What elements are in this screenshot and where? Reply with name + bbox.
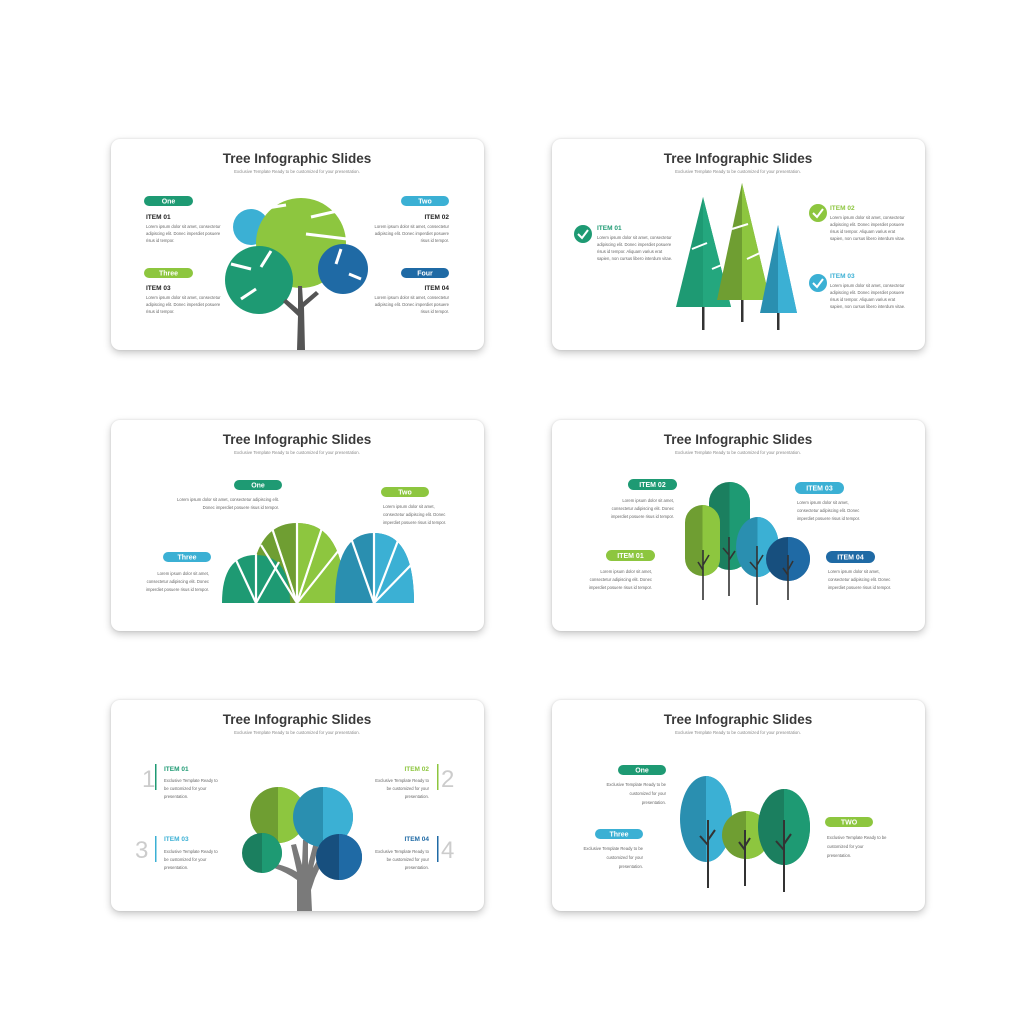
item two: consectetur adipiscing elit. Donec xyxy=(383,512,445,517)
item three: customized for your xyxy=(606,855,644,860)
heading xyxy=(664,712,812,735)
item two xyxy=(825,817,887,858)
item 03: consectetur adipiscing elit. Donec xyxy=(797,508,859,513)
item three: Exclusive Template Ready to be xyxy=(583,846,644,851)
item one: Lorem ipsum dolor sit amet, consectetur adipiscing elit. xyxy=(177,497,279,502)
item 01: Exclusive Template Ready to xyxy=(164,778,218,783)
heading: Exclusive Template Ready to be customized for your presentation. xyxy=(675,169,801,174)
item 03 xyxy=(795,482,860,521)
item 01: ITEM 01 xyxy=(617,553,644,560)
item 02: consectetur adipiscing elit. Donec xyxy=(612,506,674,511)
item 03: be customized for your xyxy=(164,857,207,862)
item 03: Exclusive Template Ready to xyxy=(164,849,218,854)
item 02 with check: ITEM 02 xyxy=(830,205,855,212)
item one: customized for your xyxy=(629,791,667,796)
item three: Three xyxy=(177,554,197,562)
item 01 with check: sapien, non cursus libero interdum vitae. xyxy=(597,256,672,261)
item 03 xyxy=(135,836,218,870)
item 02 xyxy=(375,764,454,799)
item 04: imperdiet posuere risus id tempor. xyxy=(828,585,891,590)
item four: Lorem ipsum dolor sit amet, consectetur xyxy=(375,295,450,300)
item three: adipiscing elit. Donec imperdiet posuere xyxy=(146,302,221,307)
heading xyxy=(664,151,812,174)
four round trees xyxy=(685,482,810,605)
heading: Tree Infographic Slides xyxy=(223,432,371,447)
heading: Exclusive Template Ready to be customized for your presentation. xyxy=(675,730,801,735)
heading xyxy=(223,151,371,174)
item two: imperdiet posuere risus id tempor. xyxy=(383,520,446,525)
item three xyxy=(583,829,644,869)
item two: adipiscing elit. Donec imperdiet posuere xyxy=(375,231,450,236)
heading: Tree Infographic Slides xyxy=(223,712,371,727)
item three: risus id tempor. xyxy=(146,309,174,314)
item 04 xyxy=(375,836,454,870)
item four xyxy=(375,268,450,314)
item one xyxy=(177,480,282,510)
heading: Exclusive Template Ready to be customized for your presentation. xyxy=(234,450,360,455)
item two xyxy=(381,487,446,525)
heading: Exclusive Template Ready to be customized for your presentation. xyxy=(675,450,801,455)
item 01 xyxy=(589,550,655,590)
item 01 with check: Lorem ipsum dolor sit amet, consectetur xyxy=(597,235,672,240)
item 02 with check: risus id tempor. Aliquam varius erat xyxy=(830,229,896,234)
item 02 with check: sapien, non cursus libero interdum vitae. xyxy=(830,236,905,241)
panel: slide 2 pine trees xyxy=(552,139,925,350)
item 02 with check: Lorem ipsum dolor sit amet, consectetur xyxy=(830,215,905,220)
tree illustration xyxy=(225,198,368,350)
heading: Tree Infographic Slides xyxy=(664,432,812,447)
item 02 with check xyxy=(809,204,905,241)
item 02: presentation. xyxy=(405,794,429,799)
item 01 with check: risus id tempor. Aliquam varius erat xyxy=(597,249,663,254)
item 03 with check: ITEM 03 xyxy=(830,273,855,280)
item 02: imperdiet posuere risus id tempor. xyxy=(611,514,674,519)
item two: ITEM 02 xyxy=(424,214,449,221)
item 04: ITEM 04 xyxy=(404,836,429,843)
item one xyxy=(606,765,667,805)
item 02: Lorem ipsum dolor sit amet, xyxy=(622,498,674,503)
item one: Exclusive Template Ready to be xyxy=(606,782,667,787)
item 02 xyxy=(611,479,677,519)
item three xyxy=(146,552,211,592)
item 01: imperdiet posuere risus id tempor. xyxy=(589,585,652,590)
heading xyxy=(223,712,371,735)
item 02: 2 xyxy=(441,766,454,793)
item two: Lorem ipsum dolor sit amet, consectetur xyxy=(375,224,450,229)
pine trees xyxy=(676,183,797,330)
item two: customized for your xyxy=(827,844,864,849)
item four: Four xyxy=(417,270,433,278)
bushes xyxy=(222,522,414,603)
item 03 with check: adipiscing elit. Donec imperdiet posuere xyxy=(830,290,905,295)
item one xyxy=(144,196,221,243)
item 01: ITEM 01 xyxy=(164,766,189,773)
panel: slide 1 big leaf tree xyxy=(111,139,484,350)
item 02: ITEM 02 xyxy=(639,482,666,489)
item 03: Lorem ipsum dolor sit amet, xyxy=(797,500,849,505)
item 01: presentation. xyxy=(164,794,188,799)
item 03 with check: Lorem ipsum dolor sit amet, consectetur xyxy=(830,283,905,288)
item 01 with check xyxy=(574,225,672,261)
heading: Tree Infographic Slides xyxy=(223,151,371,166)
item 03 with check: sapien, non cursus libero interdum vitae. xyxy=(830,304,905,309)
item one: One xyxy=(635,768,649,774)
panel: slide 5 numbered hand tree xyxy=(111,700,484,911)
heading: Tree Infographic Slides xyxy=(664,151,812,166)
item 03 with check: risus id tempor. Aliquam varius erat xyxy=(830,297,896,302)
heading xyxy=(223,432,371,455)
item three: Lorem ipsum dolor sit amet, consectetur xyxy=(146,295,221,300)
item 04: 4 xyxy=(441,837,454,864)
heading: Exclusive Template Ready to be customized for your presentation. xyxy=(234,730,360,735)
item one: One xyxy=(251,482,265,490)
item 01: Lorem ipsum dolor sit amet, xyxy=(600,569,652,574)
item 02: Exclusive Template Ready to xyxy=(375,778,430,783)
item one: One xyxy=(162,198,175,206)
item four: risus id tempor. xyxy=(421,309,449,314)
item three xyxy=(144,268,221,314)
item 03: presentation. xyxy=(164,865,188,870)
item one: ITEM 01 xyxy=(146,214,171,221)
item two: risus id tempor. xyxy=(421,238,449,243)
item three: Lorem ipsum dolor sit amet, xyxy=(157,571,209,576)
item 01: be customized for your xyxy=(164,786,207,791)
item 04: Lorem ipsum dolor sit amet, xyxy=(828,569,880,574)
item three: Three xyxy=(609,832,629,838)
hand tree xyxy=(242,787,362,911)
item one: risus id tempor. xyxy=(146,238,174,243)
item 02: be customized for your xyxy=(387,786,430,791)
item 01: 1 xyxy=(142,766,155,793)
item one: adipiscing elit. Donec imperdiet posuere xyxy=(146,231,221,236)
panel: slide 4 capsule trees xyxy=(552,420,925,631)
heading xyxy=(664,432,812,455)
item three: presentation. xyxy=(619,864,643,869)
item two: presentation. xyxy=(827,853,851,858)
item one: Lorem ipsum dolor sit amet, consectetur xyxy=(146,224,221,229)
item 04: be customized for your xyxy=(387,857,430,862)
item 04 xyxy=(826,551,891,590)
item 04: ITEM 04 xyxy=(837,554,864,562)
item 03: ITEM 03 xyxy=(806,486,833,492)
item one: presentation. xyxy=(642,800,666,805)
item four: ITEM 04 xyxy=(424,285,449,292)
oval trees xyxy=(680,776,810,892)
item two xyxy=(375,196,450,243)
heading: Tree Infographic Slides xyxy=(664,712,812,727)
item 03 with check xyxy=(809,273,905,309)
item 01: consectetur adipiscing elit. Donec xyxy=(590,577,652,582)
item 03: imperdiet posuere risus id tempor. xyxy=(797,516,860,521)
item 03: 3 xyxy=(135,837,148,864)
item one: Donec imperdiet posuere risus id tempor. xyxy=(203,505,279,510)
item two: TWO xyxy=(841,820,858,826)
item three: ITEM 03 xyxy=(146,285,171,292)
item three: Three xyxy=(159,270,178,278)
item three: consectetur adipiscing elit. Donec xyxy=(147,579,209,584)
panel: slide 6 oval trees xyxy=(552,700,925,911)
item 02: ITEM 02 xyxy=(404,766,429,773)
item 03: ITEM 03 xyxy=(164,836,189,843)
item 04: Exclusive Template Ready to xyxy=(375,849,430,854)
item 02 with check: adipiscing elit. Donec imperdiet posuere xyxy=(830,222,905,227)
item 01 with check: adipiscing elit. Donec imperdiet posuere xyxy=(597,242,672,247)
item two: Two xyxy=(418,198,432,206)
item four: adipiscing elit. Donec imperdiet posuere xyxy=(375,302,450,307)
heading: Exclusive Template Ready to be customized for your presentation. xyxy=(234,169,360,174)
item 01 xyxy=(142,764,218,799)
item 04: presentation. xyxy=(405,865,429,870)
panel: slide 3 bushes xyxy=(111,420,484,631)
item 01 with check: ITEM 01 xyxy=(597,225,622,232)
item two: Two xyxy=(398,490,412,496)
item 04: consectetur adipiscing elit. Donec xyxy=(828,577,890,582)
item three: imperdiet posuere risus id tempor. xyxy=(146,587,209,592)
item two: Lorem ipsum dolor sit amet, xyxy=(383,504,435,509)
item two: Exclusive Template Ready to be xyxy=(827,835,887,840)
